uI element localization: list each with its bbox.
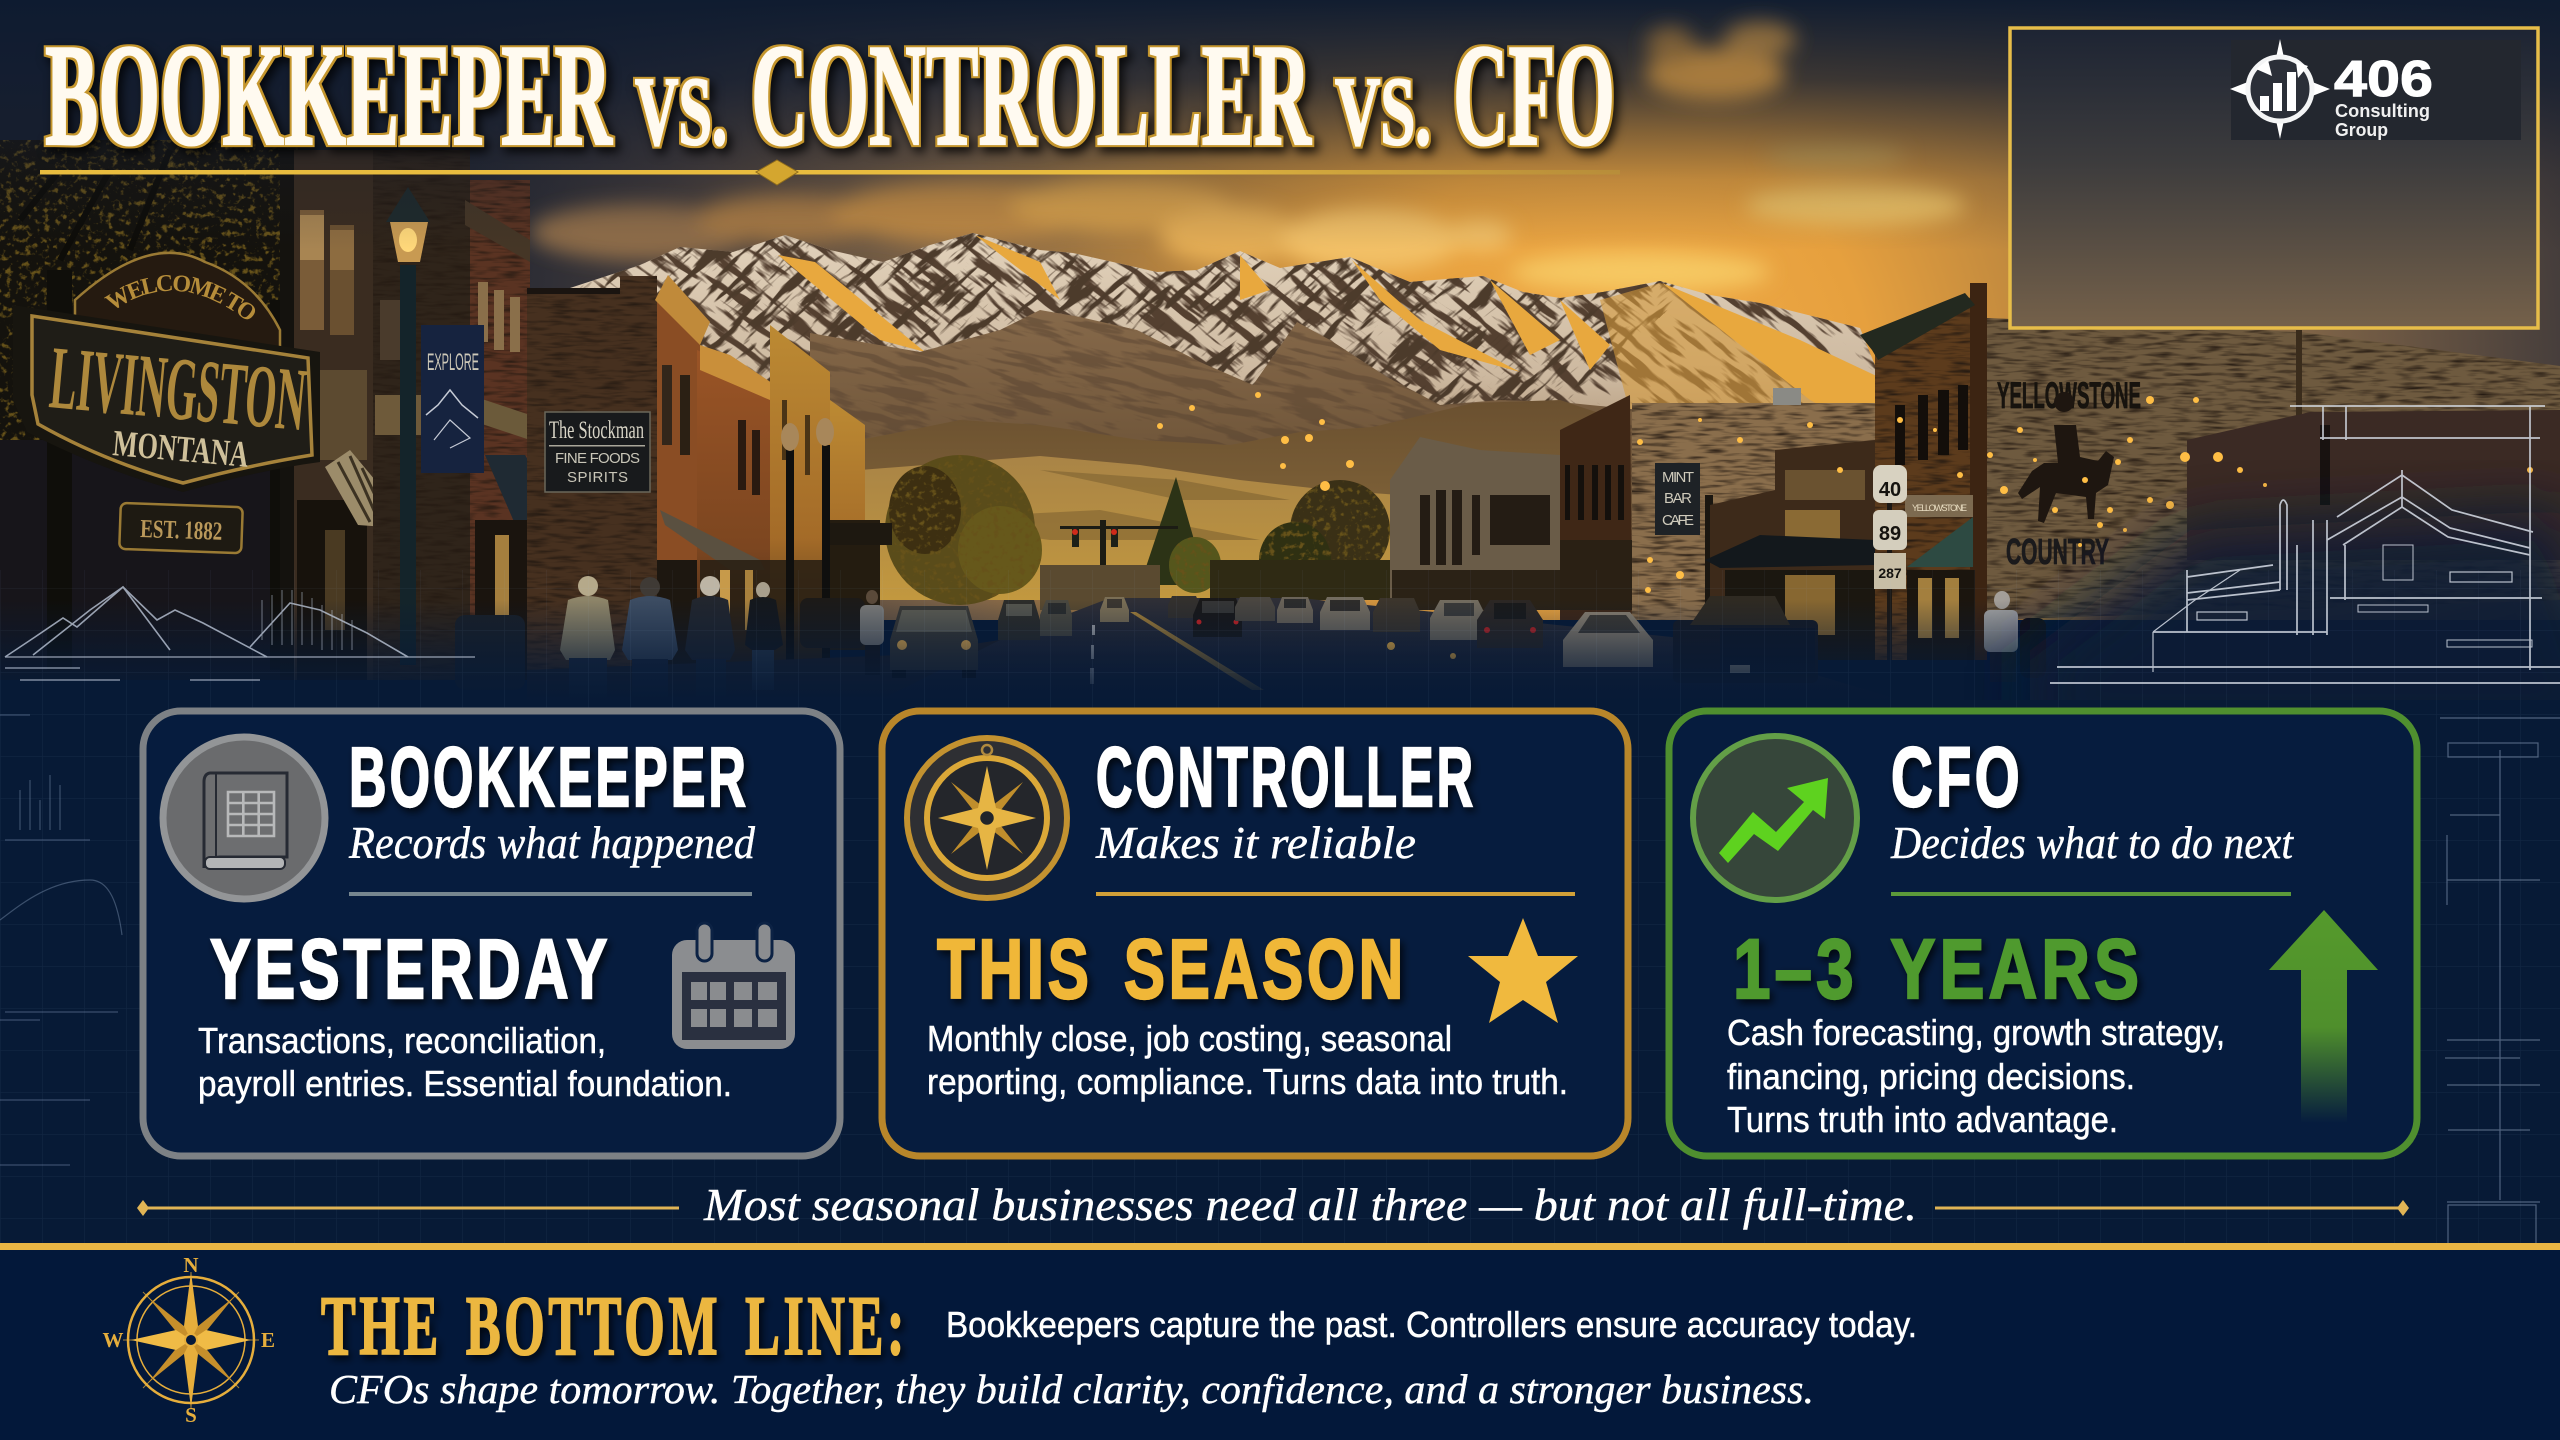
route signs: 89 <box>1879 523 1901 545</box>
cars <box>890 596 1818 683</box>
tree backdrop left <box>0 140 300 440</box>
description: payroll entries. Essential foundation. <box>198 1063 732 1104</box>
route signs <box>1873 465 1907 660</box>
rock streaks on peaks <box>580 233 1875 405</box>
top-right logo frame <box>2010 28 2538 328</box>
icon: compass rose: W <box>102 1328 124 1352</box>
sign: Mint Bar Cafe: BAR <box>1664 490 1692 507</box>
title: VS. <box>1335 58 1431 165</box>
description <box>198 1020 732 1104</box>
route signs: 287 <box>1878 565 1902 581</box>
snow peaks <box>570 233 1885 470</box>
arched sign top <box>75 253 280 360</box>
right street buildings: YELLOWSTONE <box>1912 503 1967 513</box>
heading: BOOKKEEPER <box>349 730 749 824</box>
darkening at top of page behind title <box>0 0 2560 250</box>
time horizon: yesterday: YESTERDAY <box>210 922 611 1016</box>
icon: compass rose: N <box>183 1253 199 1277</box>
sign: The Stockman: SPIRITS <box>567 469 628 486</box>
tagline with ornamental rules: Most seasonal businesses need all three — but not all full-time. <box>703 1179 1917 1230</box>
tagline: Makes it reliable <box>1095 818 1416 868</box>
icon: compass rose: S <box>185 1403 197 1427</box>
road <box>640 598 1900 700</box>
gold light specks <box>1157 392 2533 659</box>
time horizon: this season: THIS SEASON <box>937 922 1407 1016</box>
description: Transactions, reconciliation, <box>198 1020 606 1061</box>
text: welcome to: WELCOME TO <box>104 275 256 320</box>
second hills <box>860 400 1620 560</box>
blueprint: mountain sketch lower left <box>5 587 475 680</box>
distant street buildings <box>1040 565 1160 610</box>
logo: 406 Consulting Group: 406 <box>2334 50 2433 107</box>
description: reporting, compliance. Turns data into truth. <box>927 1061 1568 1102</box>
description: financing, pricing decisions. <box>1727 1056 2135 1097</box>
panel: bookkeeper <box>143 711 840 1156</box>
heading: CFO <box>1891 730 2023 824</box>
icon: calendar <box>672 923 795 1049</box>
bottom band <box>0 1250 2560 1440</box>
route signs: 40 <box>1879 479 1901 501</box>
sunset sky <box>0 0 2560 620</box>
heading: CONTROLLER <box>1096 730 1476 824</box>
striped awning <box>325 450 400 528</box>
logo: 406 Consulting Group: Group <box>2335 120 2388 140</box>
blueprint margin notes right <box>2425 718 2560 1370</box>
sidewalk <box>527 640 1000 700</box>
logo: 406 Consulting Group: Consulting <box>2335 101 2430 121</box>
title: VS. <box>635 58 727 165</box>
summary line two: CFOs shape tomorrow. Together, they build clarity, confidence, and a stronger business. <box>329 1366 1814 1412</box>
tagline: Records what happened <box>348 818 755 868</box>
sign: The Stockman <box>545 412 650 492</box>
sign: Mint Bar Cafe <box>1655 463 1700 535</box>
icon: ledger book <box>163 737 325 899</box>
text: Montana: MONTANA <box>111 423 250 476</box>
painted brick wall mural: YELLOWSTONE <box>1997 375 2141 416</box>
icon: compass <box>907 738 1067 898</box>
mountain range <box>570 233 1875 600</box>
brick shop building <box>527 276 657 680</box>
right street buildings <box>1390 283 2560 660</box>
sign posts <box>47 270 72 670</box>
icon: up arrow <box>2269 910 2378 1123</box>
icon: compass rose <box>102 1253 275 1427</box>
tagline with ornamental rules <box>137 1179 2409 1230</box>
sign: The Stockman: The Stockman <box>549 417 644 444</box>
lower brown foothills <box>810 310 1700 560</box>
title rule with diamond <box>40 160 1620 185</box>
blueprint: building elevation lower right <box>2050 406 2560 683</box>
icon: compass rose: E <box>261 1328 275 1352</box>
pedestrians <box>455 576 2046 700</box>
banner: Explore: EXPLORE <box>427 349 479 376</box>
summary line one: Bookkeepers capture the past. Controllers ensure accuracy today. <box>946 1304 1917 1345</box>
sign: Mint Bar Cafe: MINT <box>1662 469 1694 486</box>
sign: Mint Bar Cafe: CAFE <box>1662 512 1694 529</box>
sunlit ridges <box>778 235 1885 440</box>
pine and street trees <box>885 455 1390 605</box>
town sign: Livingston Montana <box>13 252 320 554</box>
cream windowed building <box>293 150 373 680</box>
large brick corner building <box>1875 295 1987 660</box>
warm glow on eastern slope <box>1600 283 1885 470</box>
description <box>1727 1012 2225 1140</box>
painted brick wall mural: COUNTRY <box>2006 531 2109 572</box>
title: CFO <box>1453 14 1615 176</box>
navy lower background with blueprint grid <box>0 570 2560 1244</box>
rider silhouette <box>2018 392 2114 523</box>
golden meadow <box>860 456 1400 600</box>
logo: 406 Consulting Group <box>2230 39 2521 140</box>
heading: the bottom line: THE BOTTOM LINE: <box>321 1279 908 1373</box>
fade of scene into navy <box>0 600 2560 702</box>
tagline: Decides what to do next <box>1890 818 2294 868</box>
plaque: Est. 1882 <box>119 503 243 553</box>
clouds <box>530 143 1965 292</box>
plaque: Est. 1882: EST. 1882 <box>140 514 223 546</box>
street lamp <box>386 187 430 665</box>
time horizon: 1-3 years: 1–3 YEARS <box>1733 922 2143 1016</box>
title: BOOKKEEPER <box>45 14 613 176</box>
main sign panel <box>13 305 320 492</box>
stone and brick section <box>373 150 470 680</box>
description: Cash forecasting, growth strategy, <box>1727 1012 2225 1053</box>
left storefronts <box>280 150 892 680</box>
icon: compass with bars <box>2230 39 2330 139</box>
painted brick wall mural <box>1987 318 2560 620</box>
high clouds above the title band <box>1645 22 1796 101</box>
icon: growth arrow <box>1693 736 1857 900</box>
panel: cfo <box>1669 711 2417 1156</box>
gold divider bar <box>0 1243 2560 1250</box>
icon: star <box>1468 918 1578 1023</box>
description: Monthly close, job costing, seasonal <box>927 1018 1452 1059</box>
description <box>927 1018 1568 1102</box>
infographic canvas: LIVINGSTON <box>46 328 310 450</box>
low dark brick building <box>2187 410 2560 560</box>
banner: Explore <box>421 325 484 473</box>
panel: controller <box>882 711 1628 1156</box>
description: Turns truth into advantage. <box>1727 1099 2118 1140</box>
blueprint margin notes left <box>0 715 122 1165</box>
title: CONTROLLER <box>751 14 1312 176</box>
title <box>45 14 1615 176</box>
sign: The Stockman: FINE FOODS <box>555 450 640 467</box>
twin lamp posts <box>786 445 794 675</box>
